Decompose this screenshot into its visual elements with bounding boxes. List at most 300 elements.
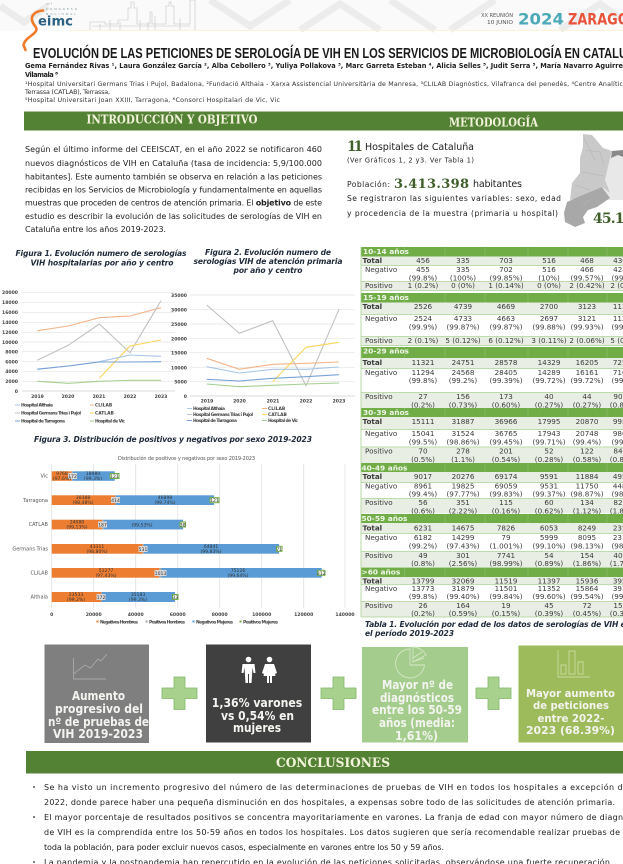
icon: pie chart xyxy=(396,647,426,678)
logo: SEIMC congress: 27 º xyxy=(46,2,53,6)
legend: figura 1: Hospital Althaia xyxy=(21,402,53,408)
chart: figura 1: 2020 xyxy=(62,394,74,400)
bar: Althaia xyxy=(52,592,178,603)
row group: 15-19 años: 15-19 años xyxy=(363,293,410,302)
legend: figura 2: CATLAB xyxy=(268,412,287,418)
text block: introducción: nuevos diagnósticos de VIH en Cataluña (tasa de incidencia: 5,9/100.000 xyxy=(25,158,322,168)
text block: variables xyxy=(347,194,561,218)
chart: figura 3 xyxy=(12,435,355,626)
heading: figura 2: Figura 2. Evolución numero de xyxy=(205,248,331,257)
line: Althaia xyxy=(37,355,161,369)
row group: 50-59 años: 14299 xyxy=(452,533,475,542)
chart: figura 2: 15000 xyxy=(171,351,187,357)
bar: Vic: 172 xyxy=(68,474,77,480)
row group: 30-39 años: Positivo xyxy=(365,447,393,456)
row group: 30-39 años: 122 xyxy=(580,447,594,456)
row group: 50-59 años: 79 xyxy=(501,533,511,542)
chart: figura 1: 8000 xyxy=(5,350,18,356)
row group: 40-49 años: Negativo xyxy=(365,481,397,490)
row group: 15-19 años: 2 (0.1%) xyxy=(408,336,439,345)
row group: 15-19 años: (99.9%) xyxy=(409,322,437,331)
panel: metodología xyxy=(337,112,623,227)
row group: mayores de 60 años: (0.2%) xyxy=(411,609,435,618)
authors xyxy=(25,62,623,79)
row group: 30-39 años: 52 xyxy=(544,447,554,456)
row group: mayores de 60 años: Negativo xyxy=(365,584,397,593)
tile: varones vs mujeres: vs 0,54% en xyxy=(221,709,294,723)
tile: mayor diagnóstico: 1,61%) xyxy=(395,729,438,743)
row group: 40-49 años: 9531 xyxy=(540,481,558,490)
row group: 30-39 años: (99.5%) xyxy=(409,437,437,446)
row group: 50-59 años: 7741 xyxy=(497,551,515,560)
row group: mayores de 60 años: (99.60%) xyxy=(532,592,566,601)
row group: 10-14 años: 2 (0.42%) xyxy=(569,281,605,290)
row group: 50-59 años: 7826 xyxy=(497,523,516,532)
tile: mayor diagnóstico: diagnósticos xyxy=(380,691,454,705)
row group: 50-59 años xyxy=(362,514,623,568)
row group: 40-49 años: (99.37%) xyxy=(532,490,566,499)
chart: figura 1: 20000 xyxy=(2,290,18,296)
row group: 40-49 años: 69174 xyxy=(495,472,518,481)
bar: CATLAB: (99,53%) xyxy=(131,522,153,528)
line: Tarragona xyxy=(37,362,161,369)
heading: metodología: METODOLOGÍA xyxy=(449,114,539,130)
row group: 15-19 años: Positivo xyxy=(365,336,393,345)
row group: 15-19 años: 2697 xyxy=(540,314,558,323)
row group: 15-19 años: 5 (0.12%) xyxy=(445,336,481,345)
row group: 40-49 años: 82 xyxy=(613,498,623,507)
row group: 50-59 años: 49 xyxy=(418,551,428,560)
tile: mayor aumento: de peticiones xyxy=(533,700,609,712)
chart: figura 1: 4000 xyxy=(5,369,18,375)
affiliations xyxy=(24,80,623,104)
axis labels: values xyxy=(50,612,355,618)
row group: 50-59 años: (0.89%) xyxy=(535,559,563,568)
row group: 30-39 años: 70 xyxy=(418,447,428,456)
row group: 10-14 años: 456 xyxy=(416,256,430,265)
bar: CATLAB: 38 xyxy=(180,522,186,528)
bar: Germans Trias: 43311 xyxy=(90,544,104,550)
row group: 40-49 años: (0.6%) xyxy=(411,506,435,515)
row group: 20-29 años: 20-29 años xyxy=(363,347,410,356)
row group: mayores de 60 años: (0.59%) xyxy=(449,609,477,618)
affiliations: ¹Hospital Universitari Germans Trias i Pujol, Badalona, ²Fundació Althaia - Xarxa Assistencial Universitària de Manresa, ³CLILAB Diagnòstics, Vilafranca del penedès, ⁴Centre Analític xyxy=(25,80,623,88)
row group: 50-59 años: 5999 xyxy=(540,533,559,542)
row group: 20-29 años: 40 xyxy=(544,392,554,401)
header banner xyxy=(0,0,623,50)
bar: Althaia: (99,2%) xyxy=(67,597,85,603)
tile: aumento progresivo: progresivo del xyxy=(55,702,143,716)
legend: figura 3 xyxy=(96,620,278,626)
text block: conclusiones: Se ha visto un incremento progresivo del número de las determinaciones de pruebas de VIH en todos los hospitales a excepción de xyxy=(44,782,623,792)
icon: plus xyxy=(476,677,511,710)
row group: 20-29 años: (99.2%) xyxy=(449,376,477,385)
axis labels: categories: Tarragona xyxy=(22,498,48,504)
bar: CLILAB xyxy=(52,568,326,579)
legend: figura 2: Hospital de Tarragona xyxy=(193,418,237,424)
axis labels: values: 20000 xyxy=(86,612,102,618)
axis labels: categories: CLILAB xyxy=(30,570,49,576)
row group: 15-19 años: 3121 xyxy=(578,314,596,323)
text block: introducción: muestras que proceden de centros de atención primaria. El objetivo de este xyxy=(25,198,322,208)
tile: aumento progresivo: Aumento xyxy=(72,689,125,703)
row group: 10-14 años: (100%) xyxy=(450,274,476,282)
row group: 20-29 años xyxy=(362,347,623,409)
bar: Tarragona: (99,74%) xyxy=(154,500,176,506)
row group: 10-14 años: Total xyxy=(362,256,382,265)
bar: CLILAB: (99,64%) xyxy=(227,573,249,579)
logo: SEIMC congress: CONGRESO xyxy=(46,7,78,11)
row group: 15-19 años xyxy=(362,293,623,345)
text block: introducción: estudio es describir la evolución de las solicitudes de serologías de VIH en xyxy=(25,211,322,221)
row group: 40-49 años: 56 xyxy=(418,498,428,507)
chart: figura 2: 0 xyxy=(184,394,187,400)
row group: 15-19 años: 2700 xyxy=(540,302,559,311)
text block: conclusiones: toda la población, para poder excluir nuevos casos, especialmente en varones entre los 50 y 59 años. xyxy=(44,842,444,852)
tile: mayor aumento: 2023 (68.39%) xyxy=(526,725,615,737)
bar: CATLAB: (99,13%) xyxy=(66,524,88,530)
text block: introducción: habitantes]. Este aumento también se observa en relación a las peticiones xyxy=(25,172,322,182)
heading: figura 2: por año y centro xyxy=(232,266,302,275)
table: datos por edad xyxy=(361,247,623,618)
legend: figura 1: Hospital de Tarragona xyxy=(21,418,65,424)
text block: conclusiones xyxy=(33,782,623,864)
row group: mayores de 60 años: 26 xyxy=(418,601,428,610)
text block: introducción: Cataluña entre los años 2019-2023. xyxy=(25,225,166,234)
bar: CLILAB: 75126 xyxy=(231,568,245,574)
legend: figura 3: Positivos Mujeres xyxy=(243,620,278,626)
authors: Gema Fernández Rivas ¹, Laura González García ², Alba Cebollero ³, Yuliya Pollakova ³, Marc Garreta Esteban ⁴, Alicia Selles ⁵, Judit Serra ⁵, María Navarro Aguirre xyxy=(25,62,623,70)
chart: figura 2: 2022 xyxy=(300,398,312,404)
row group: 50-59 años: 8095 xyxy=(578,533,596,542)
axis labels: categories: CATLAB xyxy=(29,522,49,528)
row group: 20-29 años: 11321 xyxy=(412,358,434,367)
row group: 40-49 años: (0.16%) xyxy=(492,506,520,515)
row group: 40-49 años: (1.12%) xyxy=(573,506,601,515)
tile: varones vs mujeres xyxy=(206,644,311,742)
row group: 15-19 años: (99.87%) xyxy=(446,322,480,331)
axis labels: values: 80000 xyxy=(212,612,228,618)
row group: 50-59 años: Positivo xyxy=(365,551,393,560)
axis labels: values: 100000 xyxy=(252,612,271,618)
tile: mayor aumento: Mayor aumento xyxy=(526,688,615,700)
axis labels: categories: Althaia xyxy=(31,594,48,600)
row group: 10-14 años xyxy=(362,247,623,290)
row group: 15-19 años: (99.87%) xyxy=(489,322,523,331)
legend: figura 2 xyxy=(187,406,298,424)
tile: mayor diagnóstico xyxy=(362,647,468,743)
chart: figura 1 xyxy=(2,249,187,424)
row group: 30-39 años: 15041 xyxy=(412,429,434,438)
row group: 10-14 años: 703 xyxy=(499,256,513,265)
table caption: el período 2019-2023 xyxy=(365,629,454,638)
row group: 10-14 años: 335 xyxy=(456,265,470,274)
axis labels: categories: Germans Trias xyxy=(12,546,48,552)
row group: mayores de 60 años: 13799 xyxy=(412,576,435,585)
row group: 40-49 años: (97.77%) xyxy=(446,490,480,499)
bar: Tarragona: (98,48%) xyxy=(72,500,94,506)
row group: 30-39 años: 31887 xyxy=(452,417,474,426)
legend: figura 3: Negativos Mujeres xyxy=(196,620,233,626)
row group: 30-39 años: (0.58%) xyxy=(573,455,601,464)
text block: conclusiones: de VIH es la comprendida entre los 50-59 años en todos los hospitales. Los datos sugieren que sería recomendable realizar pruebas de xyxy=(44,828,620,837)
line: Vic xyxy=(207,383,339,387)
row group: 20-29 años: (0.60%) xyxy=(492,400,520,409)
row group: 50-59 años: 50-59 años xyxy=(362,514,408,523)
row group: 20-29 años: 14329 xyxy=(538,358,561,367)
heading: metodología xyxy=(337,112,623,130)
row group: 30-39 años: (0.28%) xyxy=(535,455,563,464)
row group: mayores de 60 años: 11397 xyxy=(538,576,560,585)
bar: CATLAB xyxy=(52,520,186,530)
row group: 10-14 años: 516 xyxy=(542,265,556,274)
tile: aumento progresivo xyxy=(44,644,149,743)
bar: CLILAB: 1013 xyxy=(155,571,166,577)
row group: 30-39 años: 36765 xyxy=(495,429,517,438)
row group: 20-29 años: 44 xyxy=(582,392,592,401)
row group: 15-19 años: Negativo xyxy=(365,314,397,323)
tile: aumento progresivo: nº de pruebas de xyxy=(48,715,149,729)
row group: 40-49 años: 134 xyxy=(580,498,594,507)
stat: población xyxy=(347,177,522,192)
heading: figura 2 xyxy=(194,248,342,275)
bar: CLILAB: (97,43%) xyxy=(95,573,117,579)
illustration: city sketch xyxy=(90,0,195,30)
row group: 50-59 años: (1.001%) xyxy=(489,541,523,550)
row group: 30-39 años: 278 xyxy=(456,447,470,456)
row group: 50-59 años: 154 xyxy=(580,551,594,560)
bar: Althaia: 172 xyxy=(97,595,105,601)
chart: figura 1: 2023 xyxy=(155,394,167,400)
row group: 15-19 años: 2 (0.06%) xyxy=(569,336,605,345)
row group: 30-39 años: 15111 xyxy=(412,417,434,426)
tile: mayor diagnóstico: años (media: xyxy=(379,716,455,730)
row group: 15-19 años: 6 (0.12%) xyxy=(488,336,524,345)
legend: figura 2: Hospital Germans Trias i Pujol xyxy=(193,412,253,418)
bar: Vic: (99,3%) xyxy=(84,476,102,482)
row group: 20-29 años: 28405 xyxy=(495,368,517,377)
bar: Vic xyxy=(52,471,119,482)
row group: 20-29 años: Total xyxy=(362,358,382,367)
row group: 40-49 años: 19825 xyxy=(452,481,474,490)
text block: variables: Se registraron las siguientes variables: sexo, edad xyxy=(347,194,561,203)
map of Catalunya xyxy=(564,134,623,227)
row group: 20-29 años: 16205 xyxy=(576,358,598,367)
heading: figura 1: Figura 1. Evolución numero de serologías xyxy=(16,249,187,258)
line: Tarragona xyxy=(207,375,339,381)
chart: figura 2: 10000 xyxy=(171,365,187,371)
heading: introducción: INTRODUCCIÓN Y OBJETIVO xyxy=(86,110,258,126)
row group: 20-29 años: 14289 xyxy=(538,368,561,377)
row group: 40-49 años: (2.22%) xyxy=(449,506,477,515)
row group: 15-19 años: Total xyxy=(362,302,382,311)
row group: mayores de 60 años: 164 xyxy=(456,601,470,610)
row group: 50-59 años: 6182 xyxy=(414,533,432,542)
row group: 15-19 años: 4663 xyxy=(497,314,515,323)
heading: conclusiones xyxy=(26,751,623,774)
chart: figura 2: 20000 xyxy=(171,336,187,342)
bar: Althaia: 23533 xyxy=(69,592,83,598)
row group: mayores de 60 años: (99.84%) xyxy=(489,592,523,601)
row group: 40-49 años: 351 xyxy=(456,498,470,507)
row group: 50-59 años: 6053 xyxy=(540,523,558,532)
bar: Vic: 121 xyxy=(110,474,119,480)
bar: Vic: 18980 xyxy=(86,471,100,477)
bar: CLILAB: 312 xyxy=(317,571,326,577)
bar: Tarragona: 30388 xyxy=(76,495,90,501)
affiliations: Terrassa (CATLAB), Terrassa, xyxy=(24,89,110,96)
text block: introducción: Según el último informe del CEEISCAT, en el año 2022 se notificaron 460 xyxy=(25,145,322,154)
icon: line chart xyxy=(74,654,107,679)
panel: conclusiones xyxy=(26,751,623,864)
row group: 40-49 años: (0.62%) xyxy=(535,506,563,515)
legend: figura 2: Hospital Althaia xyxy=(193,406,225,412)
row group: 30-39 años: 201 xyxy=(499,447,513,456)
row group: 50-59 años: (99.2%) xyxy=(409,541,437,550)
row group: 40-49 años: 115 xyxy=(499,498,513,507)
line: CLILAB xyxy=(37,308,161,331)
row group: mayores de 60 años: 19 xyxy=(501,601,511,610)
legend: figura 3: Positivos Hombres xyxy=(149,620,185,626)
bar: Althaia: 35183 xyxy=(131,592,145,598)
row group: 40-49 años: (99.83%) xyxy=(489,490,523,499)
row group: 10-14 años: 516 xyxy=(542,256,556,265)
row group: 30-39 años: 31524 xyxy=(452,429,475,438)
row group: 50-59 años: (2.56%) xyxy=(449,559,477,568)
axis labels: values: 60000 xyxy=(170,612,186,618)
row group: 30-39 años: 20870 xyxy=(576,417,599,426)
row group: 30-39 años: (1.1%) xyxy=(451,455,475,464)
chart: figura 1: 2022 xyxy=(124,394,136,400)
row group: mayores de 60 años: >60 años xyxy=(362,567,401,576)
heading: figura 1 xyxy=(16,249,187,268)
row group: 15-19 años: 4733 xyxy=(454,314,472,323)
row group: mayores de 60 años: (0.39%) xyxy=(535,609,563,618)
logo: Zaragoza 2024: 2024 xyxy=(518,10,564,28)
row group: 40-49 años: 40-49 años xyxy=(362,463,408,472)
tile: varones vs mujeres: 1,36% varones xyxy=(212,696,302,710)
bar: Germans Trias xyxy=(52,544,282,555)
row group: 15-19 años: 3 (0.11%) xyxy=(531,336,567,345)
row group: 10-14 años: (99.57%) xyxy=(570,274,604,282)
row group: 10-14 años: (99.85%) xyxy=(489,274,523,282)
row group: 40-49 años: Positivo xyxy=(365,498,393,507)
row group: 15-19 años: 3123 xyxy=(578,302,596,311)
bar: CATLAB: 187 xyxy=(98,522,107,528)
axis labels: categories xyxy=(12,474,49,600)
icon: plus xyxy=(162,677,197,710)
row group: 10-14 años: 0 (0%) xyxy=(537,281,561,290)
bar: Vic: (97,6%) xyxy=(53,476,71,482)
row group: 20-29 años: (99.8%) xyxy=(409,376,437,385)
logo: SEIMC congress: eimc xyxy=(38,14,73,30)
stat: población: Población: xyxy=(347,180,390,189)
row group: mayores de 60 años: Total xyxy=(362,576,382,585)
row group: 40-49 años: (98.87%) xyxy=(570,490,604,499)
text block: conclusiones: 2022, donde parece haber una pequeña disminución en dos hospitales, a expensas sobre todo de las solicitudes de atención primaria. xyxy=(44,797,615,807)
line: CATLAB xyxy=(273,342,339,382)
icon: plus xyxy=(321,677,356,710)
line: Germans Trias xyxy=(207,305,339,386)
axis labels: values: 140000 xyxy=(335,612,355,618)
bar: Tarragona: 46898 xyxy=(158,495,172,501)
row group: 50-59 años: (98.99%) xyxy=(489,559,523,568)
text block: introducción: recibidas en los Servicios de Microbiología y fundamentalmente en aquellas xyxy=(25,186,322,194)
row group: 50-59 años: 6231 xyxy=(414,523,432,532)
icon: man and woman xyxy=(242,657,277,683)
row group: 50-59 años: 301 xyxy=(456,551,470,560)
row group: 10-14 años: 335 xyxy=(456,256,470,265)
row group: 20-29 años: (0.2%) xyxy=(411,400,435,409)
row group: 20-29 años: Negativo xyxy=(365,368,397,377)
authors: Vilamala ⁶ xyxy=(25,71,58,79)
row group: mayores de 60 años: (0.45%) xyxy=(573,609,601,618)
chart: figura 2: 2021 xyxy=(267,398,279,404)
chart: figura 2: 2023 xyxy=(333,398,345,404)
chart: figura 2: 2020 xyxy=(233,398,246,404)
row group: mayores de 60 años: 11501 xyxy=(495,584,517,593)
stat: hospitales: Hospitales de Cataluña xyxy=(365,142,474,153)
row group: mayores de 60 años: 31879 xyxy=(452,584,475,593)
row group: mayores de 60 años: (99.40%) xyxy=(446,592,480,601)
chart: figura 1: 10000 xyxy=(2,340,18,346)
row group: mayores de 60 años: (99.8%) xyxy=(409,592,437,601)
row group: mayores de 60 años: (0.15%) xyxy=(492,609,520,618)
row group: 10-14 años: 468 xyxy=(580,256,594,265)
row group: 50-59 años: (99.10%) xyxy=(532,541,566,550)
row group: 20-29 años: (0.27%) xyxy=(573,400,601,409)
row group: 20-29 años: 173 xyxy=(499,392,513,401)
row group: mayores de 60 años: 13773 xyxy=(412,584,434,593)
chart: figura 1: 18000 xyxy=(2,300,18,306)
row group: 15-19 años: 2524 xyxy=(414,314,433,323)
row group: 10-14 años: 702 xyxy=(499,265,513,274)
line: CLILAB xyxy=(207,358,339,369)
bar: Tarragona: 121 xyxy=(210,498,219,504)
row group: 30-39 años: 84 xyxy=(613,447,623,456)
row group: 10-14 años: 1 (0.14%) xyxy=(488,281,524,290)
row group: 10-14 años: Negativo xyxy=(365,265,397,274)
row group: 20-29 años: 27 xyxy=(418,392,428,401)
tile: mayor diagnóstico: entre los 50-59 xyxy=(372,703,462,717)
row group: 40-49 años: 9591 xyxy=(540,472,558,481)
chart: figura 1: 6000 xyxy=(5,360,18,366)
legend: figura 1: Hospital de Vic xyxy=(95,418,125,424)
row group: 20-29 años: (99.72%) xyxy=(570,376,604,385)
row group: 30-39 años: (0.5%) xyxy=(411,455,435,464)
chart: figura 1: 0 xyxy=(15,389,18,395)
row group: 20-29 años: 11294 xyxy=(412,368,435,377)
row group: 10-14 años: 0 (0%) xyxy=(451,281,475,290)
row group: 10-14 años: 466 xyxy=(580,265,594,274)
bar: Vic: 9768 xyxy=(56,471,68,477)
row group: 15-19 años: 4669 xyxy=(497,302,516,311)
logo: Zaragoza 2024: 10 JUNIO xyxy=(487,20,513,26)
bar: Althaia: (99,3%) xyxy=(129,597,147,603)
row group: 20-29 años: (99.39%) xyxy=(489,376,523,385)
row group: 50-59 años: 8249 xyxy=(578,523,597,532)
chart: figura 1: 14000 xyxy=(2,320,18,326)
row group: 30-39 años: (99.4%) xyxy=(573,437,601,446)
row group: 50-59 años: Total xyxy=(362,523,382,532)
chart: figura 2: 25000 xyxy=(171,322,187,328)
row group: 20-29 años: (0.73%) xyxy=(449,400,477,409)
row group: mayores de 60 años: 32069 xyxy=(452,576,475,585)
legend: figura 1: Hospital Germans Trias i Pujol xyxy=(21,410,81,416)
stat: hospitales: 11 xyxy=(347,139,363,155)
legend: figura 2: CLILAB xyxy=(268,406,286,412)
chart: figura 1: 16000 xyxy=(2,310,18,316)
